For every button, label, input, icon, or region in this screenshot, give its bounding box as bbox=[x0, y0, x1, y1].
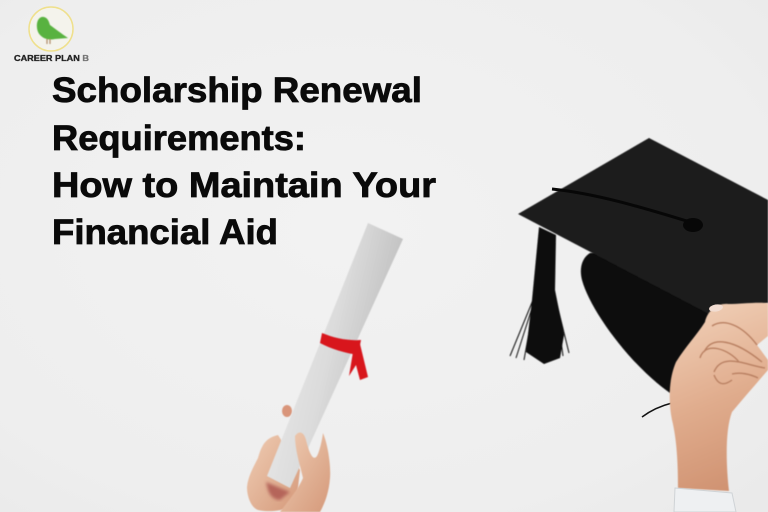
cap board bbox=[518, 138, 768, 318]
fingertip behind diploma bbox=[282, 405, 292, 417]
diploma with hand bbox=[247, 223, 403, 512]
red ribbon bbox=[320, 333, 368, 380]
logo ring bbox=[29, 7, 73, 51]
tassel bbox=[510, 227, 569, 364]
hanging cord bbox=[642, 403, 672, 417]
logo: Career Plan B bbox=[14, 7, 89, 63]
title line 2: Requirements: bbox=[52, 119, 306, 158]
shadow under diploma bbox=[266, 482, 290, 500]
button bbox=[683, 218, 703, 232]
rolled paper bbox=[267, 223, 403, 488]
fingers and palm bbox=[280, 433, 330, 512]
cap base bbox=[581, 250, 720, 393]
title line 4: Financial Aid bbox=[52, 213, 278, 252]
title line 3: How to Maintain Your bbox=[52, 166, 436, 205]
raised hand holding cap bbox=[670, 303, 768, 512]
title line 1: Scholarship Renewal bbox=[52, 71, 422, 110]
hand behind diploma bbox=[247, 435, 300, 511]
graduation cap bbox=[510, 138, 768, 417]
title bbox=[52, 71, 436, 252]
cord bbox=[552, 189, 690, 222]
fist and arm bbox=[670, 303, 768, 491]
finger creases bbox=[700, 323, 765, 384]
sleeve bbox=[674, 488, 736, 512]
icon: green bird bbox=[37, 17, 68, 44]
fingernail bbox=[708, 303, 724, 313]
logo wordmark: CAREER PLAN B bbox=[14, 53, 89, 63]
